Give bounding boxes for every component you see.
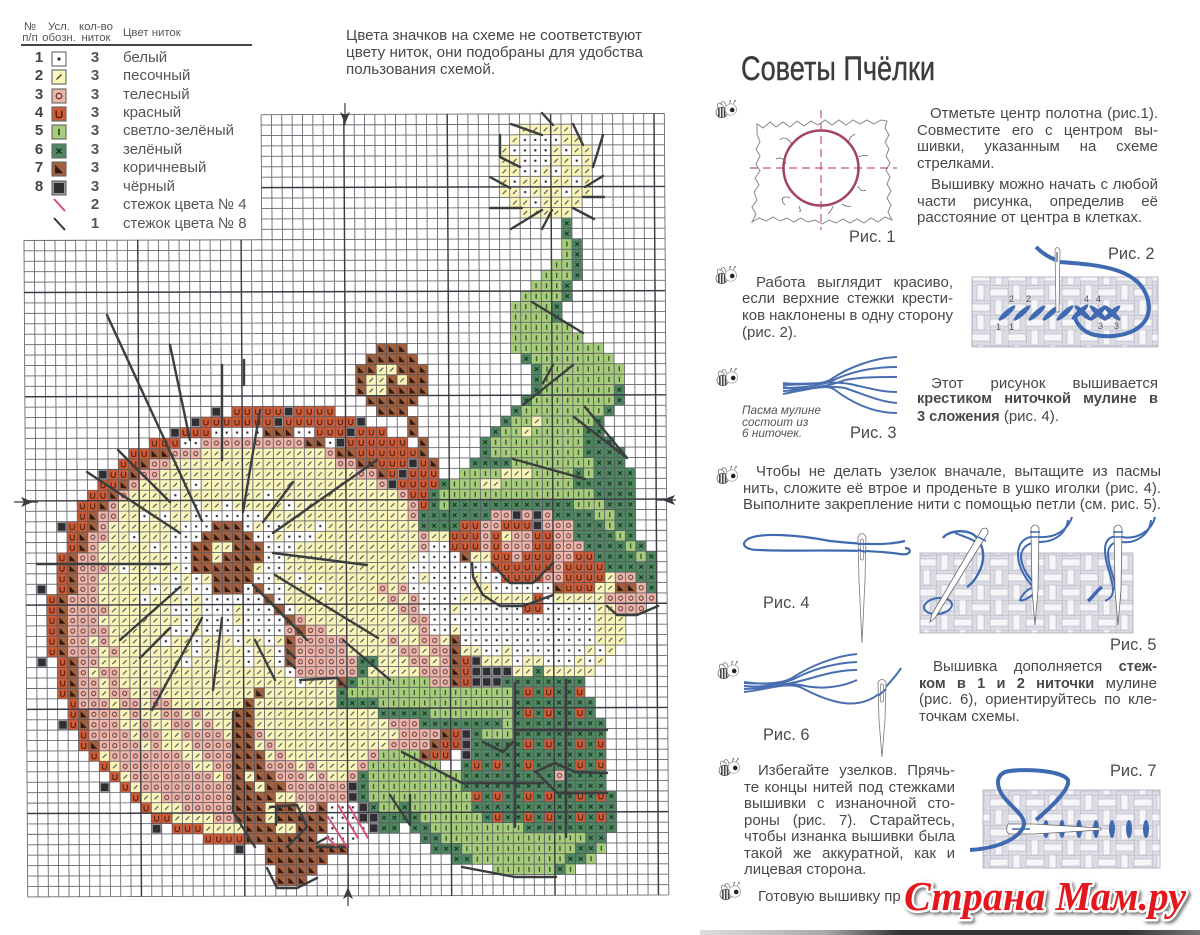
- chart cells: black: [35, 411, 544, 850]
- chart grid: [23, 113, 669, 897]
- text block: hiding thread ends: те концы нитей под стежками: [744, 779, 955, 796]
- figure 2: stitches on canvas: 2: [1009, 294, 1014, 304]
- legend header: strand count column: ниток: [81, 32, 111, 44]
- legend row 5 light green: 5: [35, 122, 43, 139]
- legend row 1 white: белый: [123, 49, 167, 66]
- legend row 4 red: [35, 104, 181, 122]
- panel: thread legend: [21, 21, 252, 232]
- figure label: Рис. 1: Рис. 1: [849, 228, 896, 246]
- text block: hiding thread ends: такой же аккуратной, как и: [744, 845, 955, 862]
- legend row: stitch colour 4: [53, 196, 247, 213]
- caption: floss has six strands: состоит из: [742, 415, 808, 429]
- text block: neat cross-stitch direction: (рис. 2).: [742, 324, 797, 341]
- text block: centre of canvas: [917, 105, 1158, 226]
- legend row 1 white: [35, 49, 167, 67]
- figure 2: stitches on canvas: 3: [1114, 321, 1119, 331]
- legend row 8 black: 8: [35, 178, 43, 195]
- text block: centre of canvas: Совместите его с центром вы-: [917, 122, 1158, 139]
- legend header: symbol column: Усл.: [48, 21, 70, 33]
- legend row 3 flesh: 3: [35, 86, 43, 103]
- text block: centre of canvas: стрелками.: [917, 155, 994, 172]
- legend row 1 white: 3: [91, 49, 99, 66]
- figure label: Рис. 3: Рис. 3: [850, 424, 897, 442]
- figure 2: stitches on canvas: 4: [1096, 294, 1101, 304]
- legend row 7 brown: 7: [35, 159, 43, 176]
- text block: neat cross-stitch direction: ков наклонены в одну сторону: [742, 307, 953, 324]
- legend header: strand count column: [79, 21, 113, 44]
- legend header: thread colour column: Цвет ниток: [123, 27, 181, 39]
- text block: avoiding knots with a loop: Чтобы не делать узелок вначале, вытащите из пасмы: [756, 463, 1161, 480]
- legend row 6 green: [35, 141, 182, 159]
- legend row 3 flesh: телесный: [123, 86, 190, 103]
- legend row 4 red: 3: [91, 104, 99, 121]
- legend row 5 light green: 3: [91, 122, 99, 139]
- text block: hiding thread ends: чтобы изнанка вышивки была: [744, 828, 955, 845]
- legend row 6 green: 3: [91, 141, 99, 158]
- figure 2: stitches on canvas: [972, 246, 1158, 348]
- legend row: stitch colour 4: 2: [91, 196, 99, 213]
- arrow: bottom centre mark: [343, 880, 353, 906]
- text block: hiding thread ends: роны (рис. 7). Старайтесь,: [744, 812, 955, 829]
- figure 3: six-strand floss fanning out: [782, 356, 898, 414]
- legend row 5 light green: светло-зелёный: [123, 122, 234, 139]
- note about chart symbols: цвету ниток, они подобраны для удобства: [346, 44, 643, 61]
- text block: supplementary stitches: [919, 658, 1157, 725]
- legend header: number column: п/п: [22, 32, 38, 44]
- caption: floss has six strands: [742, 403, 821, 440]
- arrow: top centre mark: [340, 103, 350, 125]
- straight stitches: pink: [327, 805, 368, 847]
- text block: hiding thread ends: вышивки с изнаночной сто-: [744, 795, 955, 812]
- chart cells: green: [334, 223, 658, 870]
- figure 6: single strand pulled from floss through needle: [744, 653, 902, 757]
- icon: bee 6: [718, 758, 740, 776]
- arrow: right centre mark: [656, 495, 676, 505]
- chart cells: white: [116, 140, 606, 839]
- text block: centre of canvas: Отметьте центр полотна (рис.1).: [930, 105, 1158, 122]
- text block: neat cross-stitch direction: если верхние стежки крести-: [742, 290, 953, 307]
- text block: neat cross-stitch direction: [742, 274, 953, 341]
- figure label: Рис. 7: Рис. 7: [1110, 762, 1157, 780]
- caption: floss has six strands: 6 ниточек.: [742, 426, 802, 440]
- legend row 7 brown: [35, 159, 206, 177]
- chart cells: red: [46, 411, 606, 840]
- figure 2: stitches on canvas: 3: [1098, 321, 1103, 331]
- legend row: stitch colour 8: стежок цвета № 8: [123, 215, 247, 232]
- figure 2: stitches on canvas: 1: [1009, 322, 1014, 332]
- legend row 8 black: [35, 178, 175, 196]
- legend row 5 light green: [35, 122, 234, 140]
- legend row 2 sand: песочный: [123, 67, 190, 84]
- chart cells: light green: [345, 244, 648, 870]
- figure label: Рис. 6: Рис. 6: [763, 726, 810, 744]
- text block: three-strand floss: крестиком ниточкой мулине в: [917, 391, 1158, 407]
- legend row 6 green: 6: [35, 141, 43, 158]
- watermark: Страна Мам.ру: Страна Мам.ру: [904, 873, 1187, 919]
- legend row 2 sand: 3: [91, 67, 99, 84]
- text block: three-strand floss: 3 сложения (рис. 4).: [917, 408, 1059, 425]
- legend header: strand count column: кол-во: [79, 21, 113, 33]
- legend row 4 red: 4: [35, 104, 43, 121]
- text block: hiding thread ends: лицевая сторона.: [744, 861, 866, 878]
- legend row 6 green: зелёный: [123, 141, 182, 158]
- straight stitches: black backstitch outlines: [37, 113, 658, 888]
- figure 1: embroidery fabric with centre marks: [750, 110, 897, 230]
- figure label: Рис. 4: Рис. 4: [763, 594, 810, 612]
- text block: hiding thread ends: [744, 762, 955, 878]
- legend row 2 sand: [35, 67, 190, 85]
- note about chart symbols: пользования схемой.: [346, 61, 495, 78]
- legend header: number column: №: [24, 21, 36, 33]
- icon: bee 7: [720, 882, 741, 900]
- figure 2: stitches on canvas: 1: [996, 322, 1001, 332]
- heading: Советы Пчёлки: Советы Пчёлки: [741, 50, 935, 88]
- legend row 7 brown: коричневый: [123, 159, 206, 176]
- icon: bee 4: [716, 466, 738, 484]
- text block: supplementary stitches: ком в 1 и 2 ниточки мулине: [919, 675, 1157, 692]
- legend row 2 sand: 2: [35, 67, 43, 84]
- legend row 3 flesh: 3: [91, 86, 99, 103]
- legend row 4 red: красный: [123, 104, 181, 121]
- text block: three-strand floss: Этот рисунок вышивается: [931, 375, 1158, 392]
- note about chart symbols: Цвета значков на схеме не соответствуют: [346, 27, 642, 44]
- figure label: Рис. 2: Рис. 2: [1108, 245, 1155, 263]
- legend row: stitch colour 8: [53, 215, 247, 232]
- figure 2: stitches on canvas: 4: [1084, 294, 1089, 304]
- text block: avoiding knots with a loop: [743, 463, 1161, 513]
- chart cells: brown: [56, 348, 638, 881]
- icon: bee 1: [716, 100, 737, 118]
- note about chart symbols: [346, 27, 643, 78]
- legend header: symbol column: [42, 21, 76, 44]
- icon: bee 3: [716, 368, 738, 386]
- text block: supplementary stitches: точкам схемы.: [919, 708, 1020, 725]
- text block: supplementary stitches: (рис. 6), ориентируйтесь по кле-: [919, 691, 1157, 708]
- caption: floss has six strands: Пасма мулине: [742, 403, 821, 417]
- text block: supplementary stitches: Вышивка дополняется стеж-: [933, 658, 1157, 675]
- icon: bee 2: [716, 266, 737, 284]
- chart grid: thick every-tenth lines: [23, 113, 669, 897]
- chart cells: flesh pink: [66, 442, 658, 819]
- figure 4: needle with doubled thread: [742, 533, 911, 643]
- legend row 3 flesh: [35, 86, 190, 104]
- figure 2: stitches on canvas: 2: [1026, 294, 1031, 304]
- text block: three-strand floss: [917, 375, 1158, 425]
- legend row: stitch colour 8: 1: [91, 215, 99, 232]
- text block: hiding thread ends: Избегайте узелков. Прячь-: [758, 762, 955, 779]
- figure 7: back of the embroidery with hidden thread: [970, 768, 1160, 868]
- figure 5: securing thread with a loop: [920, 516, 1156, 634]
- chart cells: sand: [85, 129, 627, 829]
- legend row 1 white: 1: [35, 49, 43, 66]
- text block: avoiding knots with a loop: Выполните закрепление нити с помощью петли (см. рис. 5).: [743, 496, 1161, 513]
- text block: centre of canvas: шивки, указанным на схеме: [917, 138, 1158, 155]
- text block: centre of canvas: Вышивку можно начать с любой: [931, 176, 1158, 193]
- text block: neat cross-stitch direction: Работа выглядит красиво,: [756, 274, 953, 291]
- page bottom scan shadow: [700, 930, 1200, 935]
- legend row 8 black: 3: [91, 178, 99, 195]
- text block: avoiding knots with a loop: нить, сложите её втрое и проденьте в ушко иголки (рис. 4).: [743, 480, 1161, 497]
- legend row 8 black: чёрный: [123, 178, 175, 195]
- legend header: symbol column: обозн.: [42, 32, 76, 44]
- text block: centre of canvas: расстояние от центра в клетках.: [917, 209, 1142, 226]
- legend row 7 brown: 3: [91, 159, 99, 176]
- text block: centre of canvas: части рисунка, определив её: [917, 193, 1158, 210]
- icon: bee 5: [718, 660, 739, 679]
- legend row: stitch colour 4: стежок цвета № 4: [123, 196, 247, 213]
- figure label: Рис. 5: Рис. 5: [1110, 636, 1157, 654]
- arrow: left centre mark: [14, 497, 38, 507]
- text block: finished embroidery: Готовую вышивку пр: [758, 888, 901, 905]
- legend header rule: [21, 44, 252, 46]
- legend header: number column: [22, 21, 38, 44]
